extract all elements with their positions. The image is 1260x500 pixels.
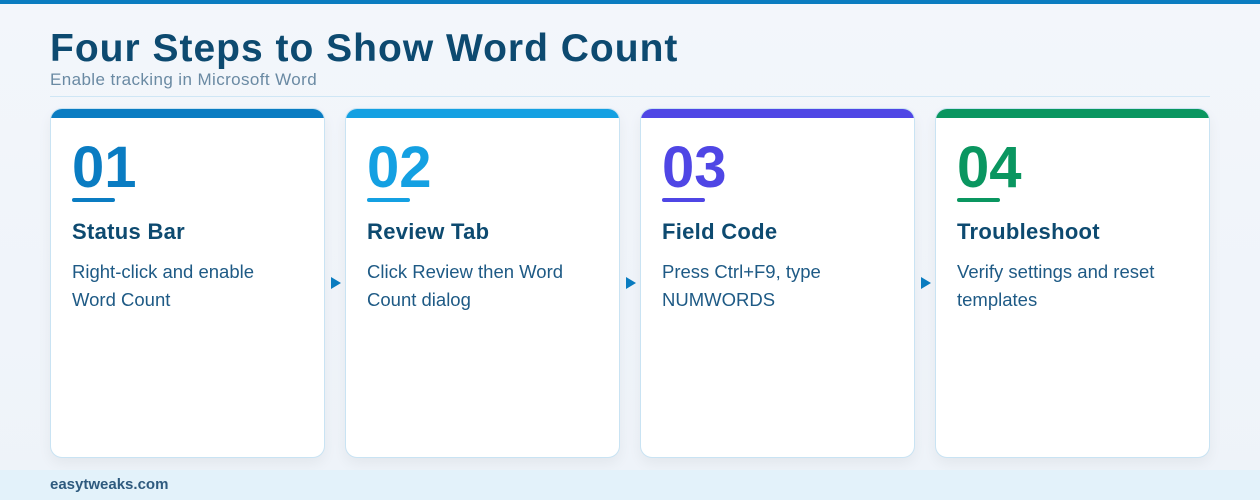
- panel: step 4: [935, 108, 1210, 458]
- heading: Troubleshoot: [957, 219, 1100, 244]
- text: Verify settings and reset templates: [957, 261, 1154, 310]
- arrow: [626, 277, 636, 289]
- heading: Field Code: [662, 219, 777, 244]
- number 04: 04: [957, 135, 1022, 200]
- title: Four Steps to Show Word Count: [50, 27, 678, 70]
- panel: step 1: [50, 108, 325, 458]
- arrow: [331, 277, 341, 289]
- text: Right-click and enable Word Count: [72, 261, 254, 310]
- heading: Review Tab: [367, 219, 489, 244]
- panel: step 3: [640, 108, 915, 458]
- number 02: 02: [367, 135, 432, 200]
- text: Press Ctrl+F9, type NUMWORDS: [662, 261, 821, 310]
- number 01: 01: [72, 135, 137, 200]
- text: Click Review then Word Count dialog: [367, 261, 563, 310]
- footer: easytweaks.com: [50, 476, 168, 493]
- subtitle: Enable tracking in Microsoft Word: [50, 70, 317, 89]
- number 03: 03: [662, 135, 727, 200]
- panel: step 2: [345, 108, 620, 458]
- heading: Status Bar: [72, 219, 185, 244]
- footer: [0, 470, 1260, 500]
- arrow: [921, 277, 931, 289]
